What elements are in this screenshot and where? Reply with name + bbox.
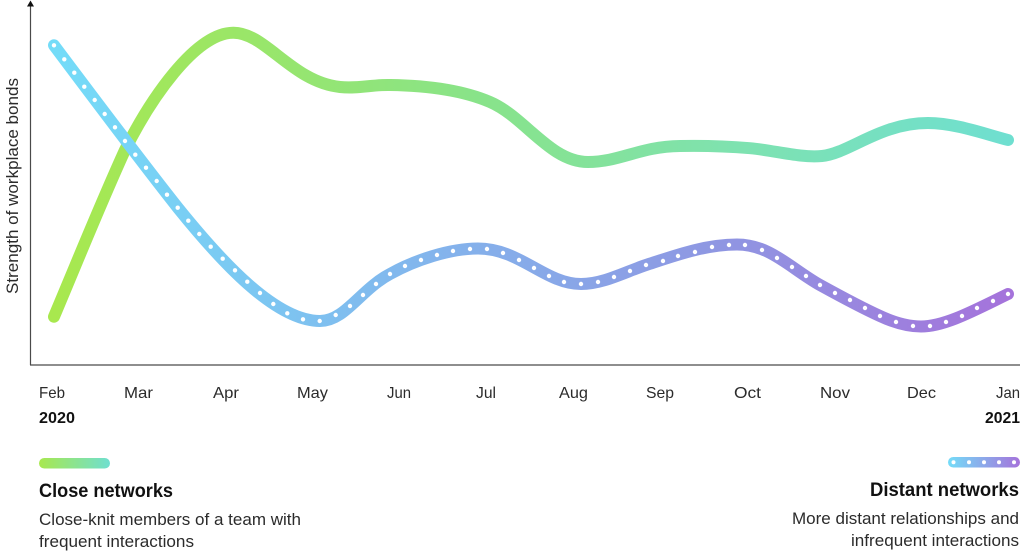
x axis: [30, 364, 1020, 366]
legend swatch: close: [39, 458, 110, 468]
legend description: close: Close-knit members of a team with: [39, 510, 301, 529]
x axis month labels: May: [297, 385, 328, 402]
x axis month labels: Mar: [124, 385, 154, 402]
legend: distant networks: [792, 457, 1020, 550]
year label 2021: 2021: [985, 410, 1020, 427]
x axis month labels: Jan: [996, 385, 1020, 402]
x axis month labels: Sep: [646, 385, 674, 402]
legend description: distant: [792, 509, 1019, 550]
line: distant networks: [52, 43, 1010, 328]
legend description: close: [39, 510, 301, 551]
x axis month labels: Apr: [213, 385, 240, 402]
x axis month labels: Dec: [907, 385, 936, 402]
legend swatch: distant: [948, 457, 1020, 468]
x axis month labels: Jul: [476, 385, 496, 402]
y axis with arrow: [27, 0, 34, 365]
x axis month labels: Oct: [734, 385, 762, 402]
legend heading: close: Close networks: [39, 481, 173, 502]
legend description: distant: More distant relationships and: [792, 509, 1019, 528]
x axis month labels: Nov: [820, 385, 850, 402]
x axis month labels: Feb: [39, 385, 65, 402]
legend heading: distant: Distant networks: [870, 480, 1019, 501]
legend description: close: frequent interactions: [39, 532, 194, 551]
x axis month labels: Jun: [387, 385, 411, 402]
line: close networks: [54, 33, 1008, 317]
legend description: distant: infrequent interactions: [851, 531, 1019, 550]
year label 2020: 2020: [39, 410, 75, 427]
legend: close networks: [39, 458, 301, 551]
x axis month labels: Aug: [559, 385, 588, 402]
x axis month labels: [39, 385, 1020, 402]
y axis label: Strength of workplace bonds: [3, 78, 22, 294]
